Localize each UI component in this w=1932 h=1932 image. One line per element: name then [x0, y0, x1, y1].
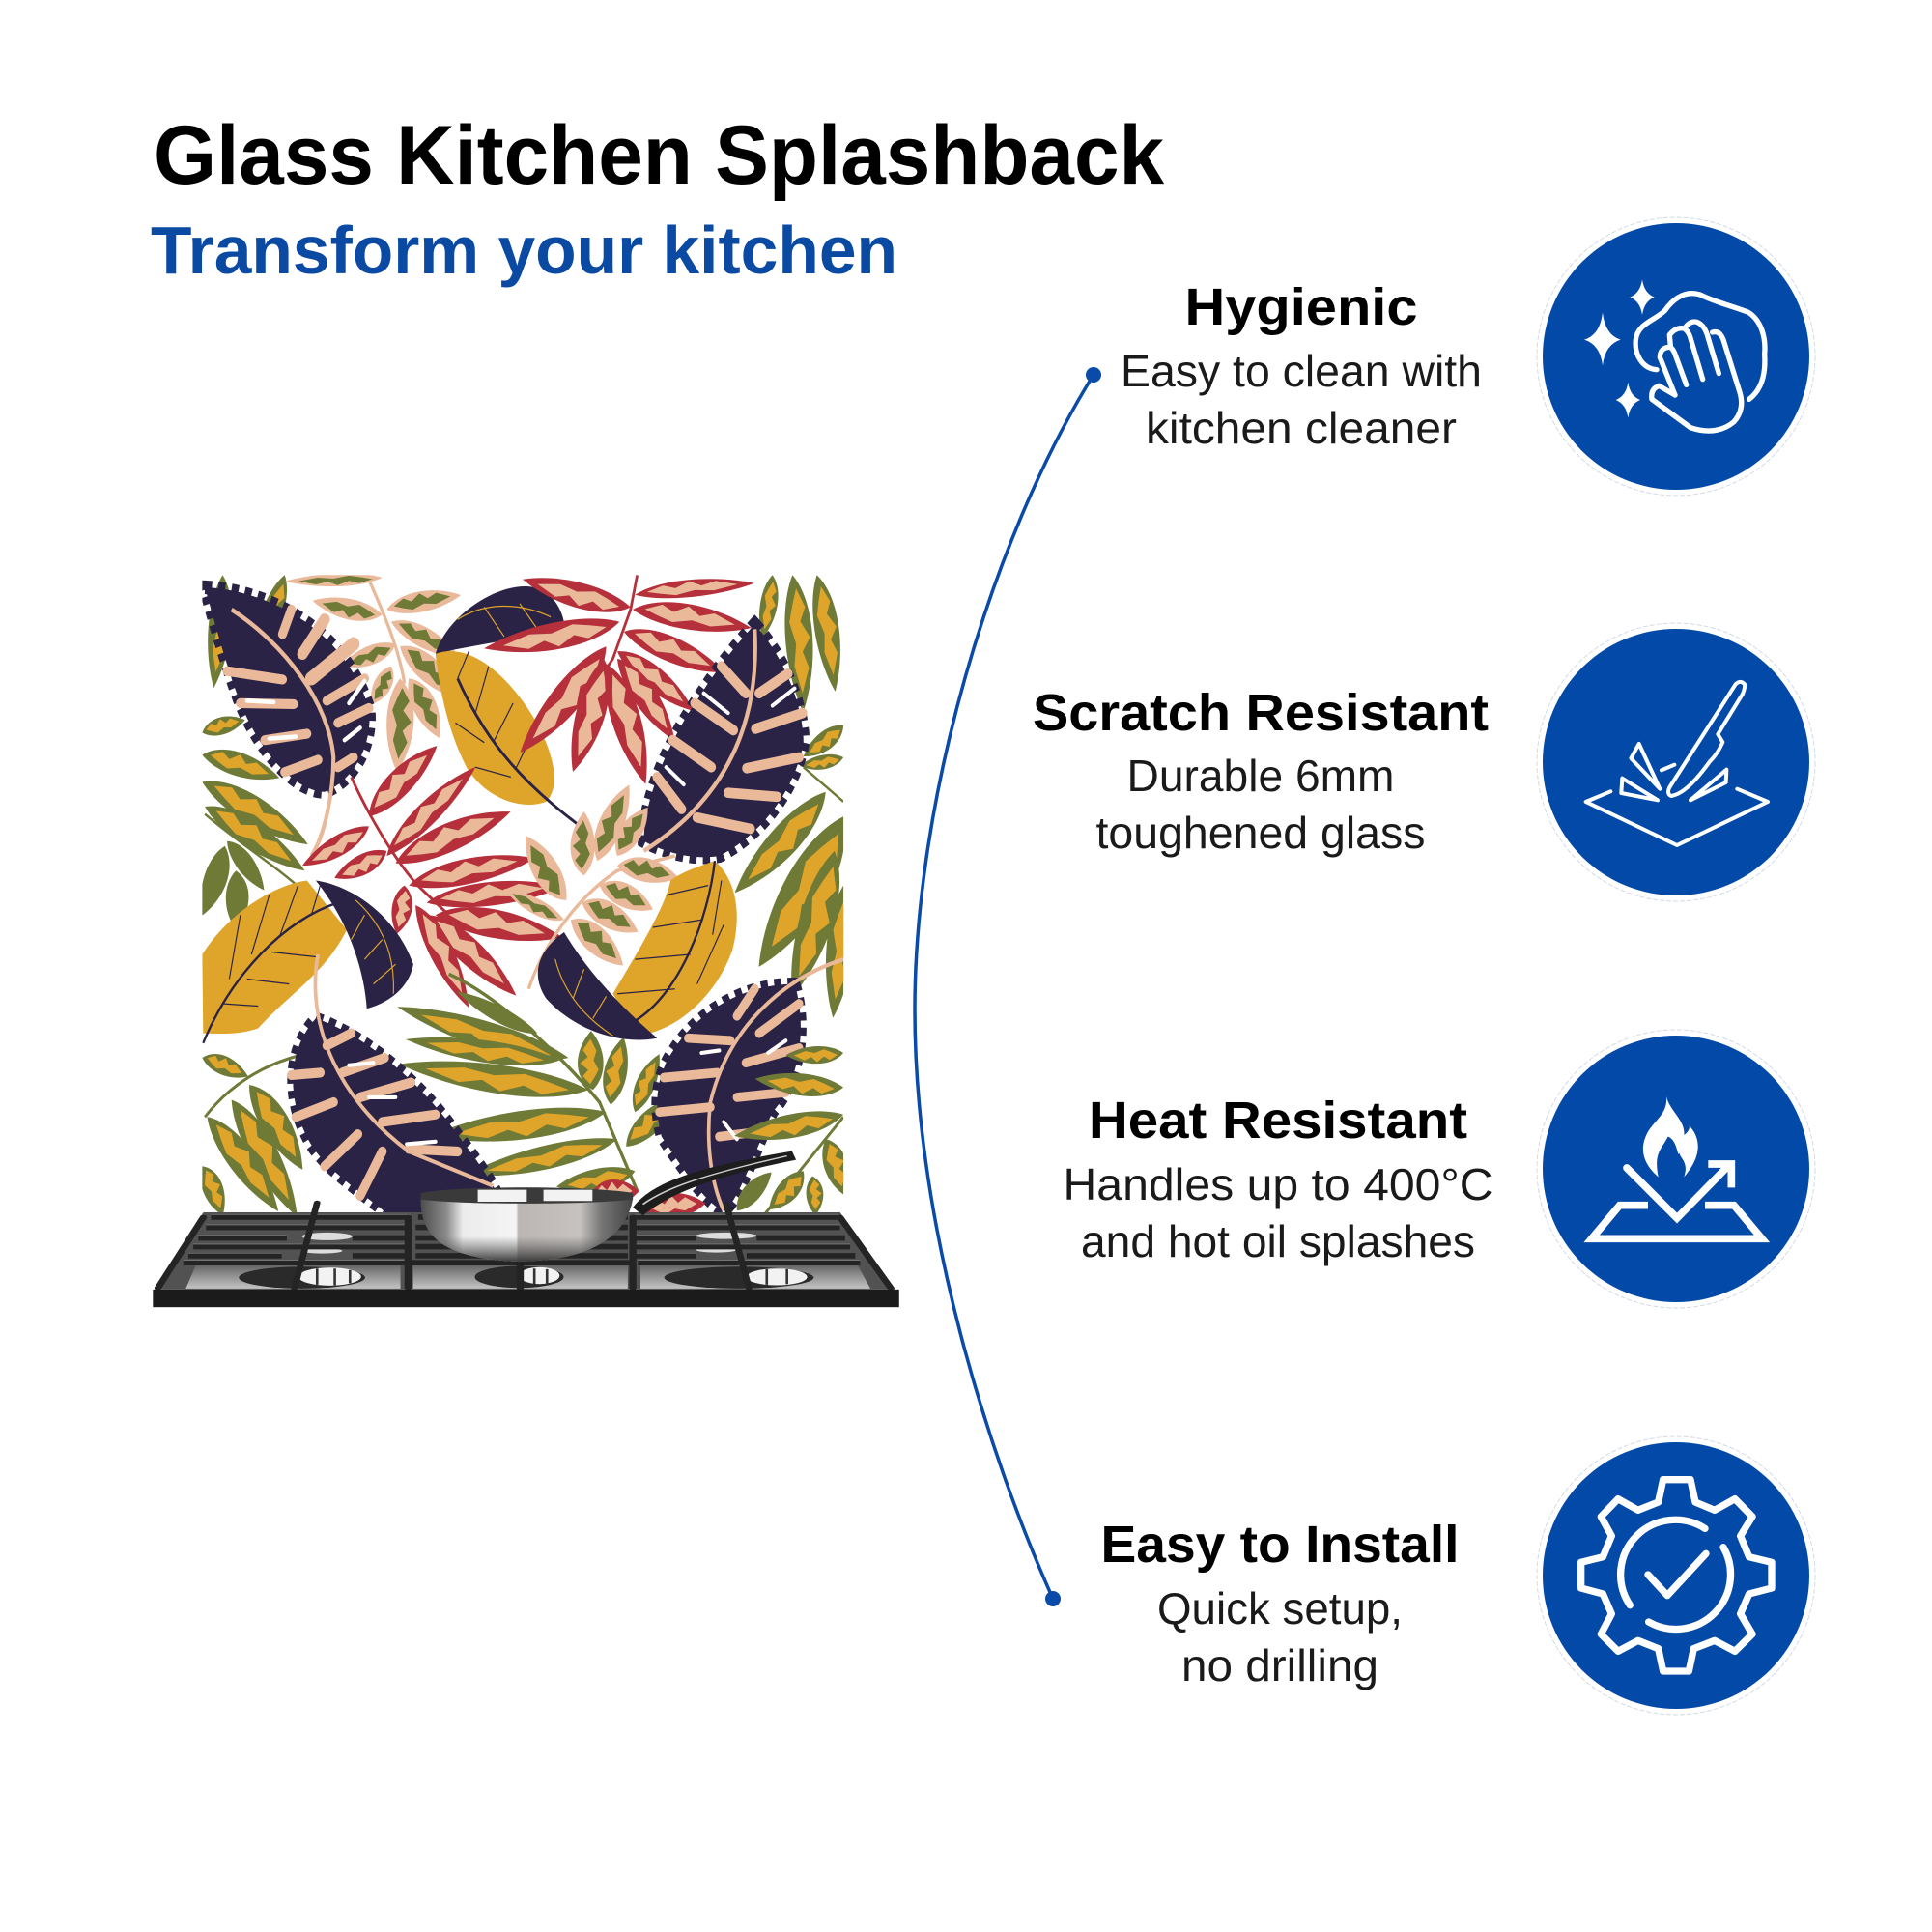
small red leaf behind pan	[594, 1179, 705, 1212]
title: Glass Kitchen Splashback	[154, 109, 1164, 202]
mustard and navy leaf centre right	[538, 861, 737, 1039]
navy leaf bottom left	[292, 954, 497, 1220]
red frond top right	[482, 568, 754, 789]
cooktop base plate	[155, 1212, 895, 1290]
feature text: Heat Resistant: Handles up to 400°C	[1063, 1159, 1493, 1209]
grate bars	[184, 1217, 861, 1263]
feature text: Hygienic: Hygienic	[1184, 278, 1418, 336]
mustard leaf top centre	[435, 651, 578, 825]
navy leaf top centre	[436, 586, 564, 654]
top right olive fronds	[734, 575, 844, 1018]
connector arc with end dots	[915, 367, 1101, 1606]
steel burner wells	[185, 1265, 870, 1289]
burners	[239, 1266, 813, 1289]
cooktop front bar	[153, 1290, 899, 1307]
tan frond top	[285, 572, 468, 773]
feature text: Easy to Install: no drilling	[1181, 1640, 1378, 1690]
pan body	[420, 1199, 633, 1262]
upper burners	[302, 1233, 756, 1254]
pan handle	[633, 1151, 796, 1215]
icon: gear with check mark	[1537, 1436, 1815, 1715]
feature text: Scratch Resistant	[1033, 684, 1489, 858]
feature text: Hygienic: kitchen cleaner	[1146, 403, 1457, 453]
feature text: Heat Resistant: and hot oil splashes	[1081, 1216, 1475, 1266]
feature text: Scratch Resistant: toughened glass	[1095, 808, 1426, 858]
pan rim	[420, 1187, 633, 1204]
bottom left olive frond	[202, 1054, 303, 1212]
feature text: Easy to Install: Quick setup,	[1157, 1583, 1403, 1634]
navy leaf top left	[205, 587, 370, 856]
feature text: Hygienic	[1121, 278, 1482, 453]
infographic canvas	[151, 124, 1816, 1716]
feature text: Heat Resistant	[1063, 1092, 1493, 1266]
icon: flame over glass with arrow	[1537, 1030, 1815, 1308]
navy leaf top right	[644, 624, 804, 857]
cooktop	[153, 1151, 899, 1307]
olive frond bottom centre	[397, 972, 660, 1190]
feature text: Hygienic: Easy to clean with	[1121, 346, 1482, 396]
splashback panel: tropical leaf pattern	[192, 568, 864, 1224]
tan frond centre right	[500, 779, 680, 989]
product illustration: splashback and cooktop	[153, 568, 899, 1307]
bottom right olive fronds	[734, 1046, 844, 1212]
feature text: Easy to Install: Easy to Install	[1101, 1516, 1459, 1574]
icon: knife scratching glass	[1537, 623, 1815, 901]
icon: hand wiping with sparkles	[1537, 217, 1815, 496]
subtitle: Transform your kitchen	[151, 213, 897, 288]
mustard and navy leaf left	[202, 881, 413, 1043]
left olive fronds	[202, 575, 308, 921]
red frond centre	[298, 735, 565, 1013]
feature text: Heat Resistant: Heat Resistant	[1089, 1092, 1467, 1150]
frying pan	[420, 1151, 796, 1262]
feature text: Scratch Resistant: Scratch Resistant	[1033, 684, 1489, 742]
feature text: Scratch Resistant: Durable 6mm	[1126, 751, 1395, 801]
navy leaf bottom right	[657, 959, 843, 1210]
feature text: Easy to Install	[1101, 1516, 1459, 1690]
